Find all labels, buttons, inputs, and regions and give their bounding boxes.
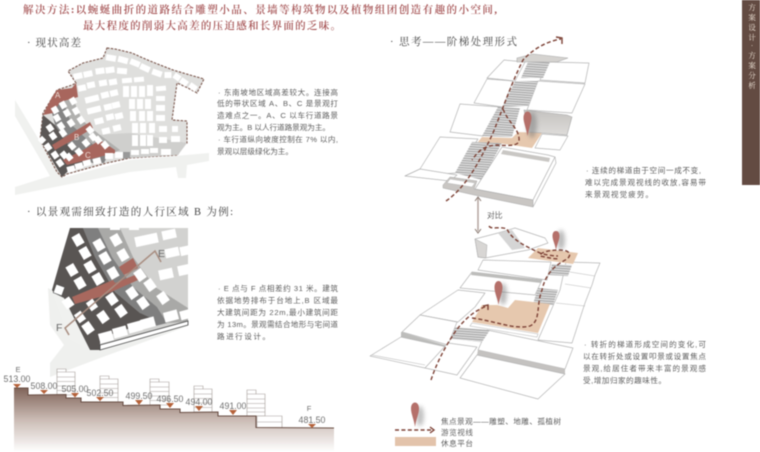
elevation markers [13, 384, 316, 428]
right terraces [538, 262, 600, 343]
legend pin [411, 402, 424, 427]
text block: continuous stair drawback [585, 165, 706, 199]
legend labels: 焦点景观——雕塑、地雕、孤植树 [441, 416, 561, 426]
arrow heads [483, 305, 488, 310]
zone labels: C [85, 151, 91, 160]
legend sight line [395, 427, 434, 433]
buildings in section [57, 369, 282, 428]
text block: continuous stair drawback: 难以完成景观视线的收放,容易带 [585, 177, 706, 187]
text block: site description [217, 87, 338, 156]
site plan: elevation zones A B C [15, 48, 209, 195]
text block: turning stair benefits: 以在转折处或设置叩景或设置焦点 [583, 351, 706, 361]
elevation labels: E [15, 365, 21, 374]
elevation labels: 508.00 [31, 381, 58, 391]
side tab: section label [742, 0, 760, 185]
terraces [478, 260, 551, 280]
arrow head [556, 37, 562, 44]
text block: turning stair benefits: 景观,给居住者带来丰富的景观感 [583, 363, 706, 373]
side tab: section label: 案 [748, 12, 756, 22]
elevation labels: 494.00 [186, 397, 213, 407]
lower right terrace [475, 147, 555, 200]
text block: turning stair benefits: 受,增加归家的趣味性。 [583, 375, 666, 385]
text block: site description: 观为主。B 以人行道路景观为主。 [217, 122, 330, 132]
text block: zone B description [217, 283, 338, 341]
legend platform swatch [395, 437, 436, 446]
side tab: section label: 分 [748, 70, 756, 80]
rest platform [478, 132, 542, 148]
elevation labels [4, 365, 326, 425]
legend labels: 游览视线 [441, 427, 473, 437]
zone B [52, 122, 93, 150]
side tab: section label: 方 [748, 2, 756, 12]
elevation labels: 502.50 [87, 388, 114, 398]
title: solution statement: 最大程度的削弱大高差的压迫感和长界面的乏味。 [83, 19, 341, 32]
title: solution statement: 解决方法:以蜿蜒曲折的道路结合雕塑小品、景墙等构筑物以及植物组团创造有趣的小空间, [23, 3, 497, 16]
stairs [549, 264, 572, 276]
zone labels [55, 91, 91, 160]
section line E-F [65, 251, 161, 335]
road backdrop [48, 288, 188, 377]
text block: turning stair benefits: · 转折的梯道形成空间的变化,可 [584, 339, 706, 349]
elevation labels: 481.50 [299, 415, 326, 425]
sight lines [431, 306, 487, 380]
text block: zone B description: · E 点与 F 点相差约 31 米。建筑 [218, 283, 338, 293]
sight line [446, 39, 561, 201]
enlarged plan: zone B with EF section line [48, 226, 193, 377]
top block [475, 228, 548, 258]
elevation labels: 505.00 [62, 384, 89, 394]
diagram: turning stairway with platforms [370, 226, 600, 399]
diagram: continuous straight stairway [405, 37, 589, 207]
legend labels: 休息平台 [441, 438, 473, 448]
zone A [43, 83, 78, 115]
arrow: comparison [475, 197, 503, 233]
elevation labels: 513.00 [4, 374, 31, 384]
red terrace strip [72, 275, 138, 304]
focal pin upper [552, 230, 565, 250]
legend [395, 402, 561, 448]
buildings [38, 54, 198, 173]
retaining wall box [524, 110, 572, 135]
text block: zone B description: 为 13m。景观需结合地形与宅间道 [217, 319, 338, 329]
text block: site description: 造难点之一。A、C 以车行道路景 [217, 110, 338, 120]
stairs [521, 62, 550, 78]
text block: site description: 低的带状区域 A、B、C 是景观打 [217, 98, 338, 108]
site boundary [40, 48, 204, 177]
text block: continuous stair drawback: · 连续的梯道由于空间一成不变, [586, 165, 701, 175]
point labels: F [56, 322, 62, 334]
heading: existing height difference: · 现状高差 [27, 36, 81, 49]
text block: zone B description: 大建筑间距为 22m,最小建筑间距 [217, 307, 338, 317]
text block: zone B description: 路进行设计。 [217, 331, 270, 341]
section elevation E to F [4, 365, 334, 452]
heading: pedestrian zone B example: · 以景观需细致打造的人行区域 B 为例: [27, 205, 233, 218]
arrow: comparison: 对比 [487, 210, 503, 220]
middle rest platform [472, 300, 550, 333]
zone labels: B [74, 133, 79, 142]
side tab: section label: 计 [748, 32, 756, 42]
title: solution statement [23, 3, 497, 32]
side tab: section label: · [751, 41, 753, 50]
focal pin lower [494, 281, 507, 305]
buildings [53, 226, 193, 344]
legend labels [441, 416, 561, 448]
terraces [487, 60, 525, 81]
text block: site description: · 东南坡地区域高差较大。连接高 [218, 87, 338, 97]
elevation labels: 491.00 [220, 401, 247, 411]
text block: continuous stair drawback: 来景观视觉疲劳。 [585, 189, 653, 199]
text block: zone B description: 依据地势排布于台地上,B 区域最 [217, 295, 338, 305]
side tab: section label: 案 [748, 60, 756, 70]
text block: turning stair benefits [583, 339, 706, 385]
zone C [63, 140, 115, 165]
elevation labels: F [307, 404, 312, 413]
side tab: section label: 方 [748, 50, 756, 60]
text block: site description: 景观以层级绿化为主。 [217, 146, 293, 156]
focal point pin [524, 112, 537, 138]
side tab: section label: 设 [748, 23, 756, 32]
elevation labels: 496.50 [157, 394, 184, 404]
road network [15, 100, 209, 195]
top slab [517, 54, 568, 62]
side tab: section label: 析 [748, 80, 756, 90]
front base [443, 177, 533, 207]
zone labels: A [55, 91, 61, 100]
ground profile [14, 388, 334, 452]
heading: stair treatment: · 思考——阶梯处理形式 [390, 35, 518, 48]
upper rest platform [528, 248, 578, 264]
text block: site description: · 车行道纵向坡度控制在 7% 以内, [218, 134, 338, 144]
elevation labels: 499.50 [126, 391, 153, 401]
point labels [56, 248, 165, 334]
point labels: E [158, 248, 165, 260]
